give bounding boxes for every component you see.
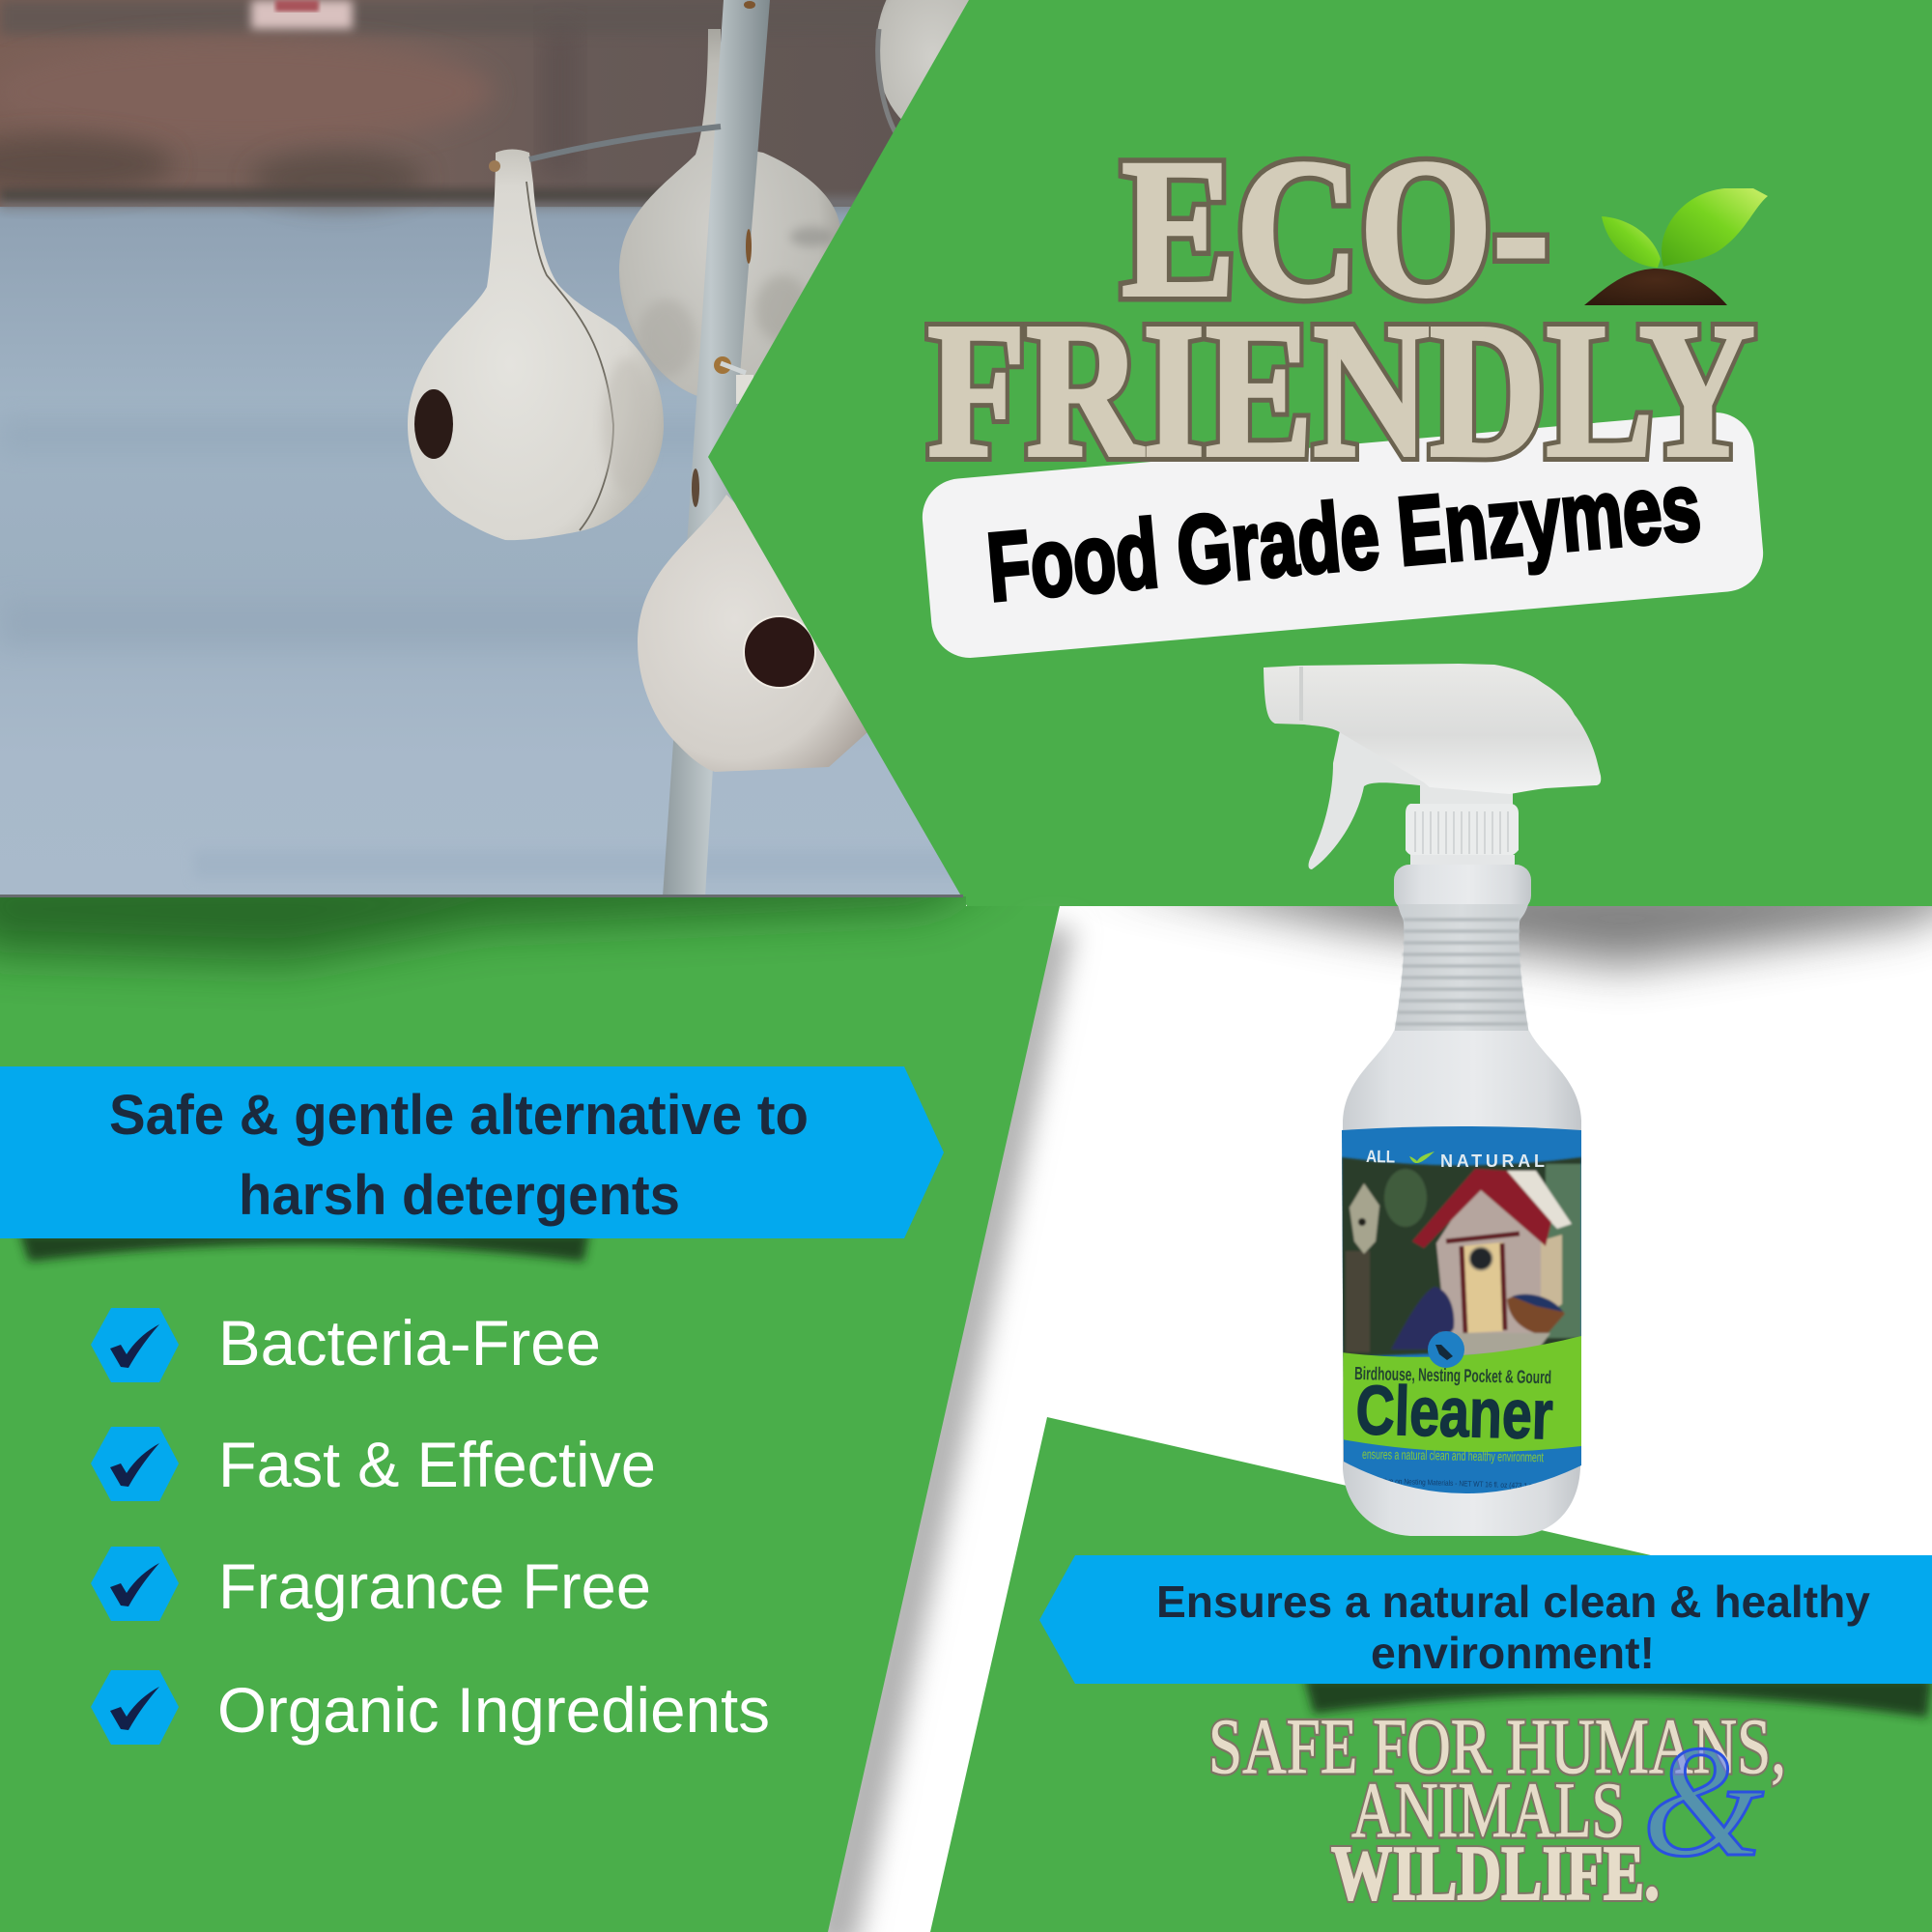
banner: ensures natural clean: [1039, 1555, 1932, 1684]
product: spray bottle: [1264, 664, 1601, 1536]
feature: fast and effective: Fast & Effective: [218, 1429, 656, 1500]
photo background: hillside: [0, 0, 976, 211]
panel: lower right green: [930, 1417, 1932, 1932]
slogan: safe for humans, animals and wildlife: ANIMALS: [1351, 1766, 1625, 1854]
slogan: safe for humans, animals and wildlife: WILDLIFE.: [1331, 1832, 1660, 1917]
feature: fragrance free: Fragrance Free: [218, 1550, 651, 1622]
rust marks: [692, 1, 755, 507]
icon: check hexagon: [91, 1308, 179, 1382]
banner: ensures natural clean: environment!: [1371, 1628, 1655, 1678]
title: Eco-Friendly: ECO-: [1122, 119, 1549, 338]
bottle connector: [1420, 784, 1513, 808]
script ampersand: &: [1642, 1713, 1764, 1889]
bottle neck ring: [1394, 865, 1531, 911]
callout: food grade enzymes tag: [920, 410, 1766, 661]
banner: safe and gentle alternative: [0, 1066, 944, 1238]
gourd neck above lower gourd: [736, 375, 753, 404]
bottle label: [1338, 1121, 1585, 1507]
label green band: [1342, 1336, 1581, 1452]
banner: ensures natural clean: Ensures a natural clean & healthy: [1156, 1577, 1870, 1627]
bottle ribbed neck: [1394, 904, 1529, 1034]
photo bottom edge: [0, 895, 963, 897]
bottle body: [1343, 1031, 1581, 1536]
bottle nozzle seam: [1299, 667, 1303, 721]
gourd main with entrance hole: [408, 149, 664, 540]
panel: top right green arrow panel: [708, 0, 1932, 906]
bottle trigger lever: [1309, 726, 1430, 869]
banner: safe and gentle alternative: harsh detergents: [239, 1164, 680, 1227]
label text: ALL: [1366, 1147, 1395, 1167]
photo background: water: [0, 198, 976, 896]
title: Eco-Friendly: FRIENDLY: [927, 284, 1755, 497]
title: Eco-Friendly: ECO-: [1122, 119, 1549, 338]
shadow: under top left banner: [19, 1233, 589, 1262]
title: Eco-Friendly: FRIENDLY: [927, 284, 1755, 497]
shadow: along lower left panel edge: [807, 927, 1074, 1932]
icon: check hexagon: [91, 1547, 179, 1621]
slogan: safe for humans, animals and wildlife: ANIMALS: [1351, 1766, 1625, 1854]
gourd lower with entrance hole: [638, 495, 869, 772]
pole: [663, 0, 770, 896]
title: Eco-Friendly: [927, 119, 1755, 497]
gourd top right: [876, 0, 1002, 137]
bottle collar: [1406, 804, 1519, 867]
icon: sprout in soil: [1584, 188, 1768, 305]
label photo: [1342, 1157, 1581, 1357]
photo: purple martin gourds over a lake: [0, 0, 1002, 896]
panel: lower left green: [0, 896, 1060, 1932]
bottle spray head: [1264, 664, 1601, 794]
icon: check hexagon: [91, 1670, 179, 1745]
label text: NATURAL: [1440, 1151, 1545, 1171]
gourd behind pole: [619, 29, 840, 396]
label text: Birdhouse, Nesting Pocket & Gourd: [1354, 1364, 1551, 1388]
label text: [1354, 1147, 1554, 1491]
feature: organic ingredients: Organic Ingredients: [217, 1674, 770, 1746]
label text: Effective on Nesting Materials - NET WT 16 fl. oz (473.1 ml): [1369, 1476, 1538, 1491]
shadow: under green top right panel on white: [1092, 874, 1932, 966]
gourd hanger rod: [489, 127, 746, 373]
label bird badge: [1428, 1331, 1464, 1368]
banner: safe and gentle alternative: Safe & gentle alternative to: [109, 1084, 809, 1147]
icon: check hexagon: [91, 1427, 179, 1501]
shadow: under lower right banner: [1304, 1678, 1932, 1718]
shadow: below photo on green panel: [0, 865, 1005, 961]
label text: Cleaner: [1355, 1372, 1554, 1454]
slogan: safe for humans, animals and wildlife: [1208, 1702, 1786, 1917]
label text: ensures a natural clean and healthy environment: [1362, 1446, 1544, 1464]
slogan: safe for humans, animals and wildlife: WILDLIFE.: [1331, 1832, 1660, 1917]
feature: bacteria free: Bacteria-Free: [218, 1307, 601, 1378]
